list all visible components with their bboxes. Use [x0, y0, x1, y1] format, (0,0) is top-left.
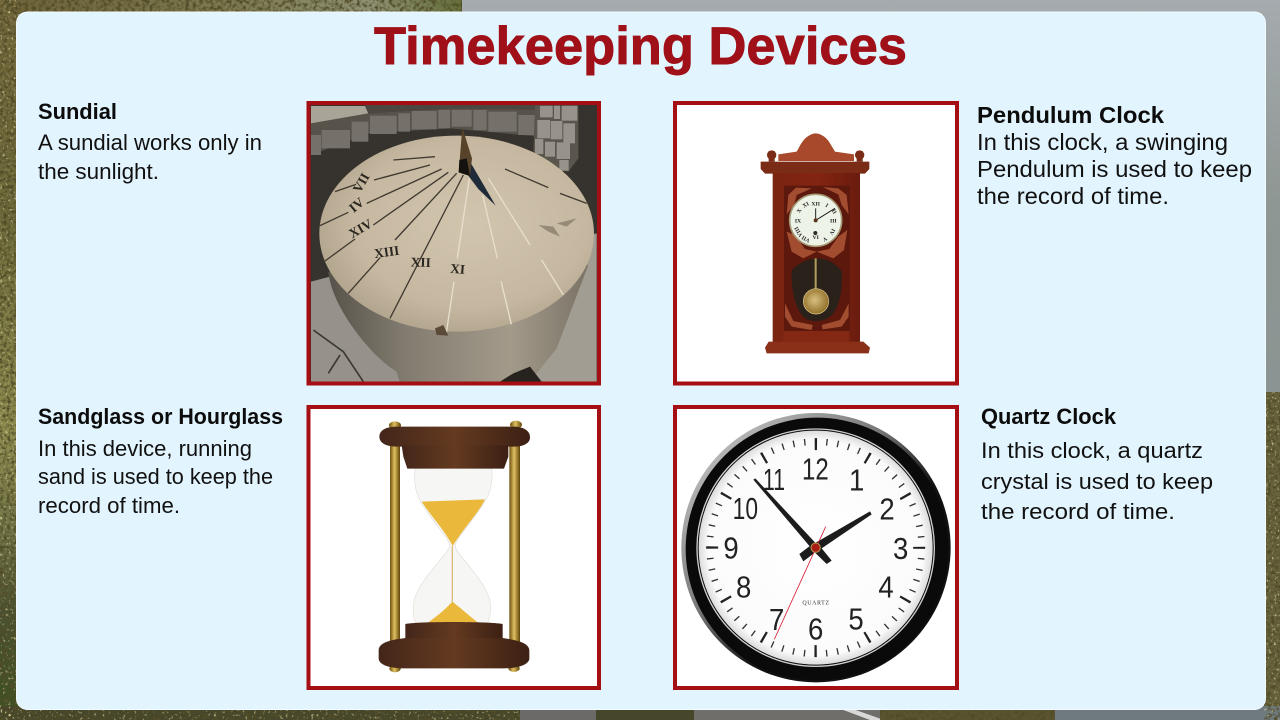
image frame: quartz clock: [675, 407, 957, 688]
image: pendulum clock: [673, 102, 958, 385]
image frame: sundial: [308, 103, 599, 384]
clock numerals: 1: [849, 464, 864, 498]
text block: quartz clock: crystal is used to keep: [981, 469, 1213, 494]
text block: pendulum clock: Pendulum is used to keep: [977, 156, 1252, 182]
hourglass sand: [421, 499, 485, 628]
image: pendulum clock: VII: [800, 233, 811, 243]
image: pendulum clock: X: [796, 207, 804, 214]
text block: sandglass or hourglass: sand is used to keep the: [38, 464, 273, 489]
text block: quartz clock: [981, 404, 1213, 524]
image: sundial: XIV: [346, 216, 375, 241]
clock numerals: 3: [893, 532, 908, 566]
text block: sundial: Sundial: [38, 99, 117, 124]
clock dial: [790, 194, 842, 246]
text block: pendulum clock: the record of time.: [977, 183, 1169, 209]
image: sundial: [308, 102, 600, 384]
image: sundial: IV: [346, 194, 367, 215]
image: pendulum clock: IV: [827, 227, 836, 237]
image: pendulum clock: IX: [795, 218, 802, 224]
clock numerals: 11: [763, 463, 785, 497]
text block: pendulum clock: Pendulum Clock: [977, 102, 1165, 128]
text block: quartz clock: In this clock, a quartz: [981, 438, 1203, 463]
clock numerals: 9: [723, 531, 739, 565]
text block: pendulum clock: [977, 102, 1252, 209]
image: quartz clock: QUARTZ: [802, 600, 829, 606]
hour ticks: [712, 444, 919, 651]
image: sundial: XII: [411, 254, 431, 270]
clock hands: [753, 478, 872, 639]
image: pendulum clock: III: [830, 218, 837, 224]
text block: quartz clock: Quartz Clock: [981, 404, 1116, 429]
text block: sandglass or hourglass: [38, 404, 283, 518]
pendulum window: [792, 258, 842, 321]
text block: pendulum clock: In this clock, a swinging: [977, 129, 1228, 155]
minute ticks: [710, 442, 922, 654]
text block: sandglass or hourglass: In this device, running: [38, 436, 252, 461]
clock crest: [778, 133, 854, 161]
text block: sandglass or hourglass: record of time.: [38, 493, 180, 518]
image: pendulum clock: I: [824, 203, 830, 210]
image frame: hourglass: [308, 407, 599, 688]
clock numerals: 6: [808, 612, 823, 646]
image: pendulum clock: XII: [811, 202, 821, 208]
text block: sundial: A sundial works only in: [38, 130, 262, 155]
image: sundial: XI: [450, 261, 466, 277]
image: pendulum clock: II: [830, 208, 838, 216]
clock numerals: [723, 452, 908, 646]
clock numerals: 2: [879, 492, 895, 526]
clock numerals: 12: [802, 452, 829, 486]
hourglass wood: [379, 427, 530, 668]
image: hourglass: [308, 407, 600, 688]
hourglass glass: [413, 468, 492, 625]
image: quartz clock: [673, 407, 958, 690]
text block: sundial: the sunlight.: [38, 159, 159, 184]
image: pendulum clock: XI: [802, 201, 811, 210]
image: sundial: VII: [350, 170, 373, 195]
text block: sandglass or hourglass: Sandglass or Hourglass: [38, 404, 283, 429]
text block: quartz clock: the record of time.: [981, 499, 1175, 524]
clock numerals: 8: [736, 570, 751, 604]
clock numerals: 7: [769, 603, 784, 637]
image: pendulum clock: VI: [813, 235, 820, 241]
clock numerals: 5: [848, 602, 864, 636]
carving: [785, 187, 849, 330]
text block: sundial: [38, 99, 262, 184]
clock numerals: 4: [878, 570, 894, 604]
image: pendulum clock: V: [820, 235, 828, 243]
image frame: pendulum clock: [675, 103, 957, 384]
title: Timekeeping Devices: [374, 17, 907, 76]
image: pendulum clock: VIII: [793, 225, 804, 238]
hourglass rods: [389, 421, 522, 672]
image: sundial: XIII: [373, 243, 400, 261]
clock numerals: 10: [733, 492, 758, 526]
